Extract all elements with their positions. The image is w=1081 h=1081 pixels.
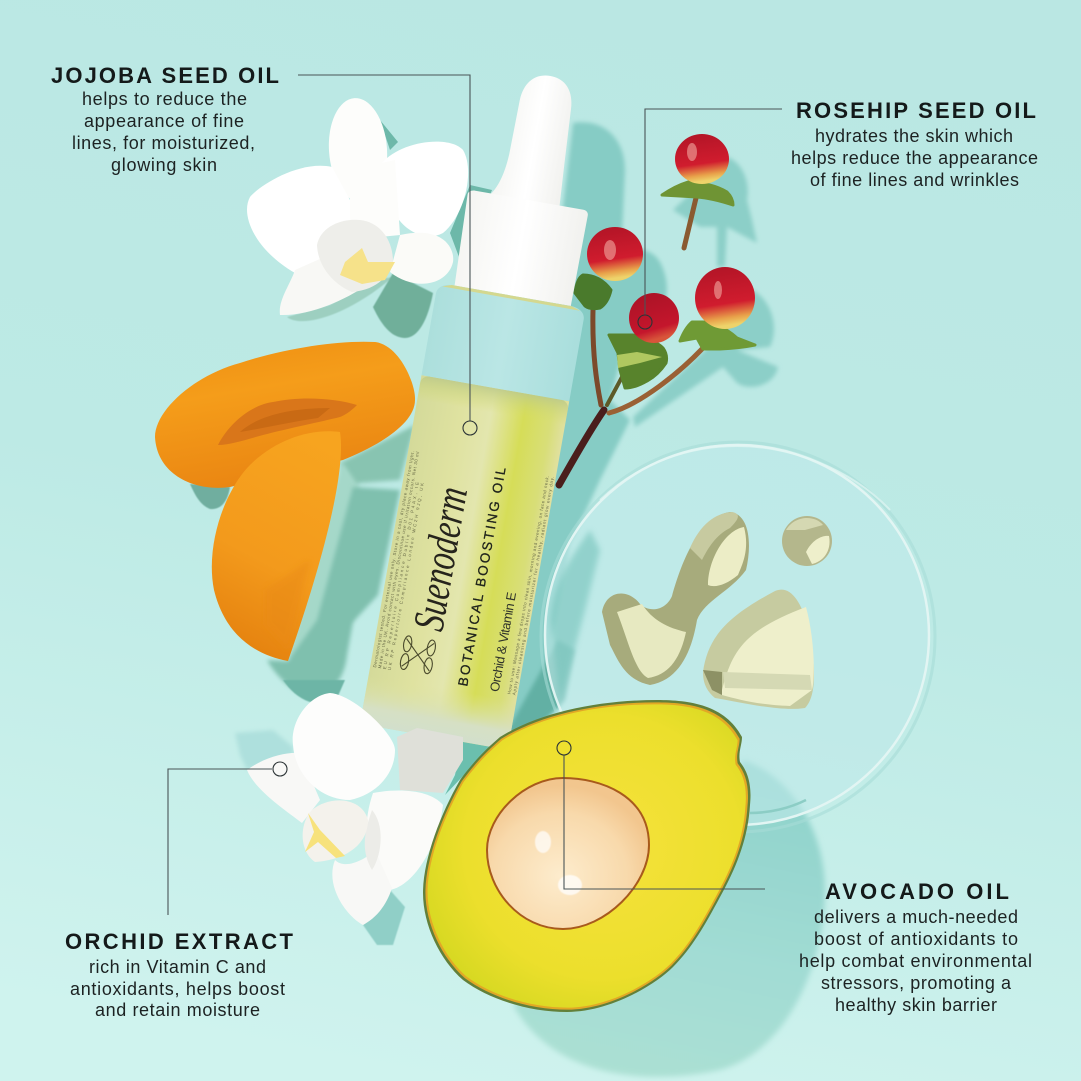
bottle body: [360, 375, 569, 750]
callout: avocado oil: [557, 741, 1032, 1015]
body: of fine lines and wrinkles: [810, 170, 1019, 190]
drop: large: [703, 590, 814, 709]
avocado rim: [425, 702, 748, 1010]
leader line: [557, 741, 765, 889]
apricot: lower wedge: [212, 431, 341, 661]
body: [799, 907, 1032, 1015]
leader line: [638, 109, 782, 329]
body: rich in Vitamin C and: [89, 957, 266, 977]
heading: ROSEHIP SEED OIL: [796, 98, 1036, 123]
body: [791, 126, 1038, 190]
dropper bulb: [488, 69, 582, 214]
product: serum bottle: [360, 63, 624, 750]
left petal: [247, 166, 352, 275]
callout: orchid extract: [65, 762, 294, 1020]
rosehip shadows: [673, 157, 757, 267]
body: stressors, promoting a: [821, 973, 1012, 993]
dropper cap: [452, 190, 589, 306]
apricot shadows: [340, 425, 415, 487]
orchid centre: [303, 800, 368, 862]
leader line: [298, 75, 477, 435]
avocado flesh: [428, 704, 746, 1008]
lower right petal: [390, 233, 453, 284]
avocado skin: [423, 700, 751, 1012]
top petal: [325, 96, 391, 204]
left petal: [247, 753, 320, 823]
petri dish: [541, 442, 935, 832]
botanical: lower orchid: [247, 693, 463, 925]
body: antioxidants, helps boost: [70, 979, 285, 999]
body: help combat environmental: [799, 951, 1032, 971]
right petal: [380, 142, 468, 236]
body: healthy skin barrier: [835, 995, 997, 1015]
body: glowing skin: [111, 155, 217, 175]
bottle label text: [372, 450, 555, 696]
body: lines, for moisturized,: [72, 133, 255, 153]
botanical: upper orchid: [247, 96, 468, 315]
bottle label text: BOTANICAL BOOSTING OIL: [455, 466, 509, 687]
orchid shadows: [380, 120, 398, 150]
callout: rosehip seed oil: [638, 98, 1038, 329]
lower orchid shadows: [235, 730, 293, 770]
bottle label text: Orchid & Vitamin E: [487, 591, 519, 693]
body: delivers a much-needed: [814, 907, 1018, 927]
bottle label text: Apply after cleansing and before moisturizer for a healthy, radiant glow every day.: [511, 476, 555, 696]
leader line: [168, 762, 287, 915]
right petal: [366, 791, 443, 890]
body: appearance of fine: [84, 111, 244, 131]
heading: ORCHID EXTRACT: [65, 929, 294, 954]
drop: bent: [602, 512, 749, 685]
back petal: [397, 728, 463, 793]
top petal: [293, 693, 395, 800]
drop: small: [782, 516, 832, 566]
avocado shadow: [513, 760, 825, 1077]
blue band: [422, 283, 586, 401]
body: [70, 957, 285, 1020]
orchid centre: [317, 220, 393, 292]
bottle label text: UK RP Repertoire Compliance London WC2H 9JQ, UK: [387, 482, 425, 670]
botanical: rosehip branch: [559, 134, 755, 485]
body: helps to reduce the: [82, 89, 247, 109]
bottle label text: How to use: Massage a few drops into clean skin, morning and evening, on face and neck.: [506, 475, 550, 695]
body: hydrates the skin which: [815, 126, 1013, 146]
leaves: [575, 182, 755, 388]
bottle label text: Dermatologist tested. For external use only. Store in a cool, dry place away from light.: [372, 450, 415, 668]
lower left petal: [280, 250, 367, 315]
botanical: avocado half: [423, 700, 751, 1012]
apricot pit cavity: [218, 398, 357, 445]
apricot: upper half: [155, 342, 415, 488]
bottle label text: Made in the UK. Avoid contact with eyes. Discontinue use if irritation occurs. Net 30 ml: [377, 451, 420, 669]
dropper and bottle shadow: [500, 122, 667, 745]
body: helps reduce the appearance: [791, 148, 1038, 168]
berries: [587, 134, 755, 343]
avocado seed: [487, 778, 649, 929]
bottom petal: [332, 850, 392, 925]
botanical: apricot halves: [155, 342, 415, 661]
logo mark: [399, 635, 437, 674]
branch stems: [559, 198, 703, 485]
bottle label text: Suenoderm: [404, 483, 477, 634]
body: [72, 89, 255, 175]
callout: jojoba seed oil: [51, 63, 477, 435]
heading: JOJOBA SEED OIL: [51, 63, 279, 88]
bottle label text: EU RP Repertoire Compliance Dublin D01 P4AX, IE: [382, 482, 420, 670]
oil drops: [602, 512, 832, 709]
heading: AVOCADO OIL: [825, 879, 1009, 904]
body: and retain moisture: [95, 1000, 260, 1020]
body: boost of antioxidants to: [814, 929, 1018, 949]
shadows cast on the surface: [190, 120, 825, 1077]
